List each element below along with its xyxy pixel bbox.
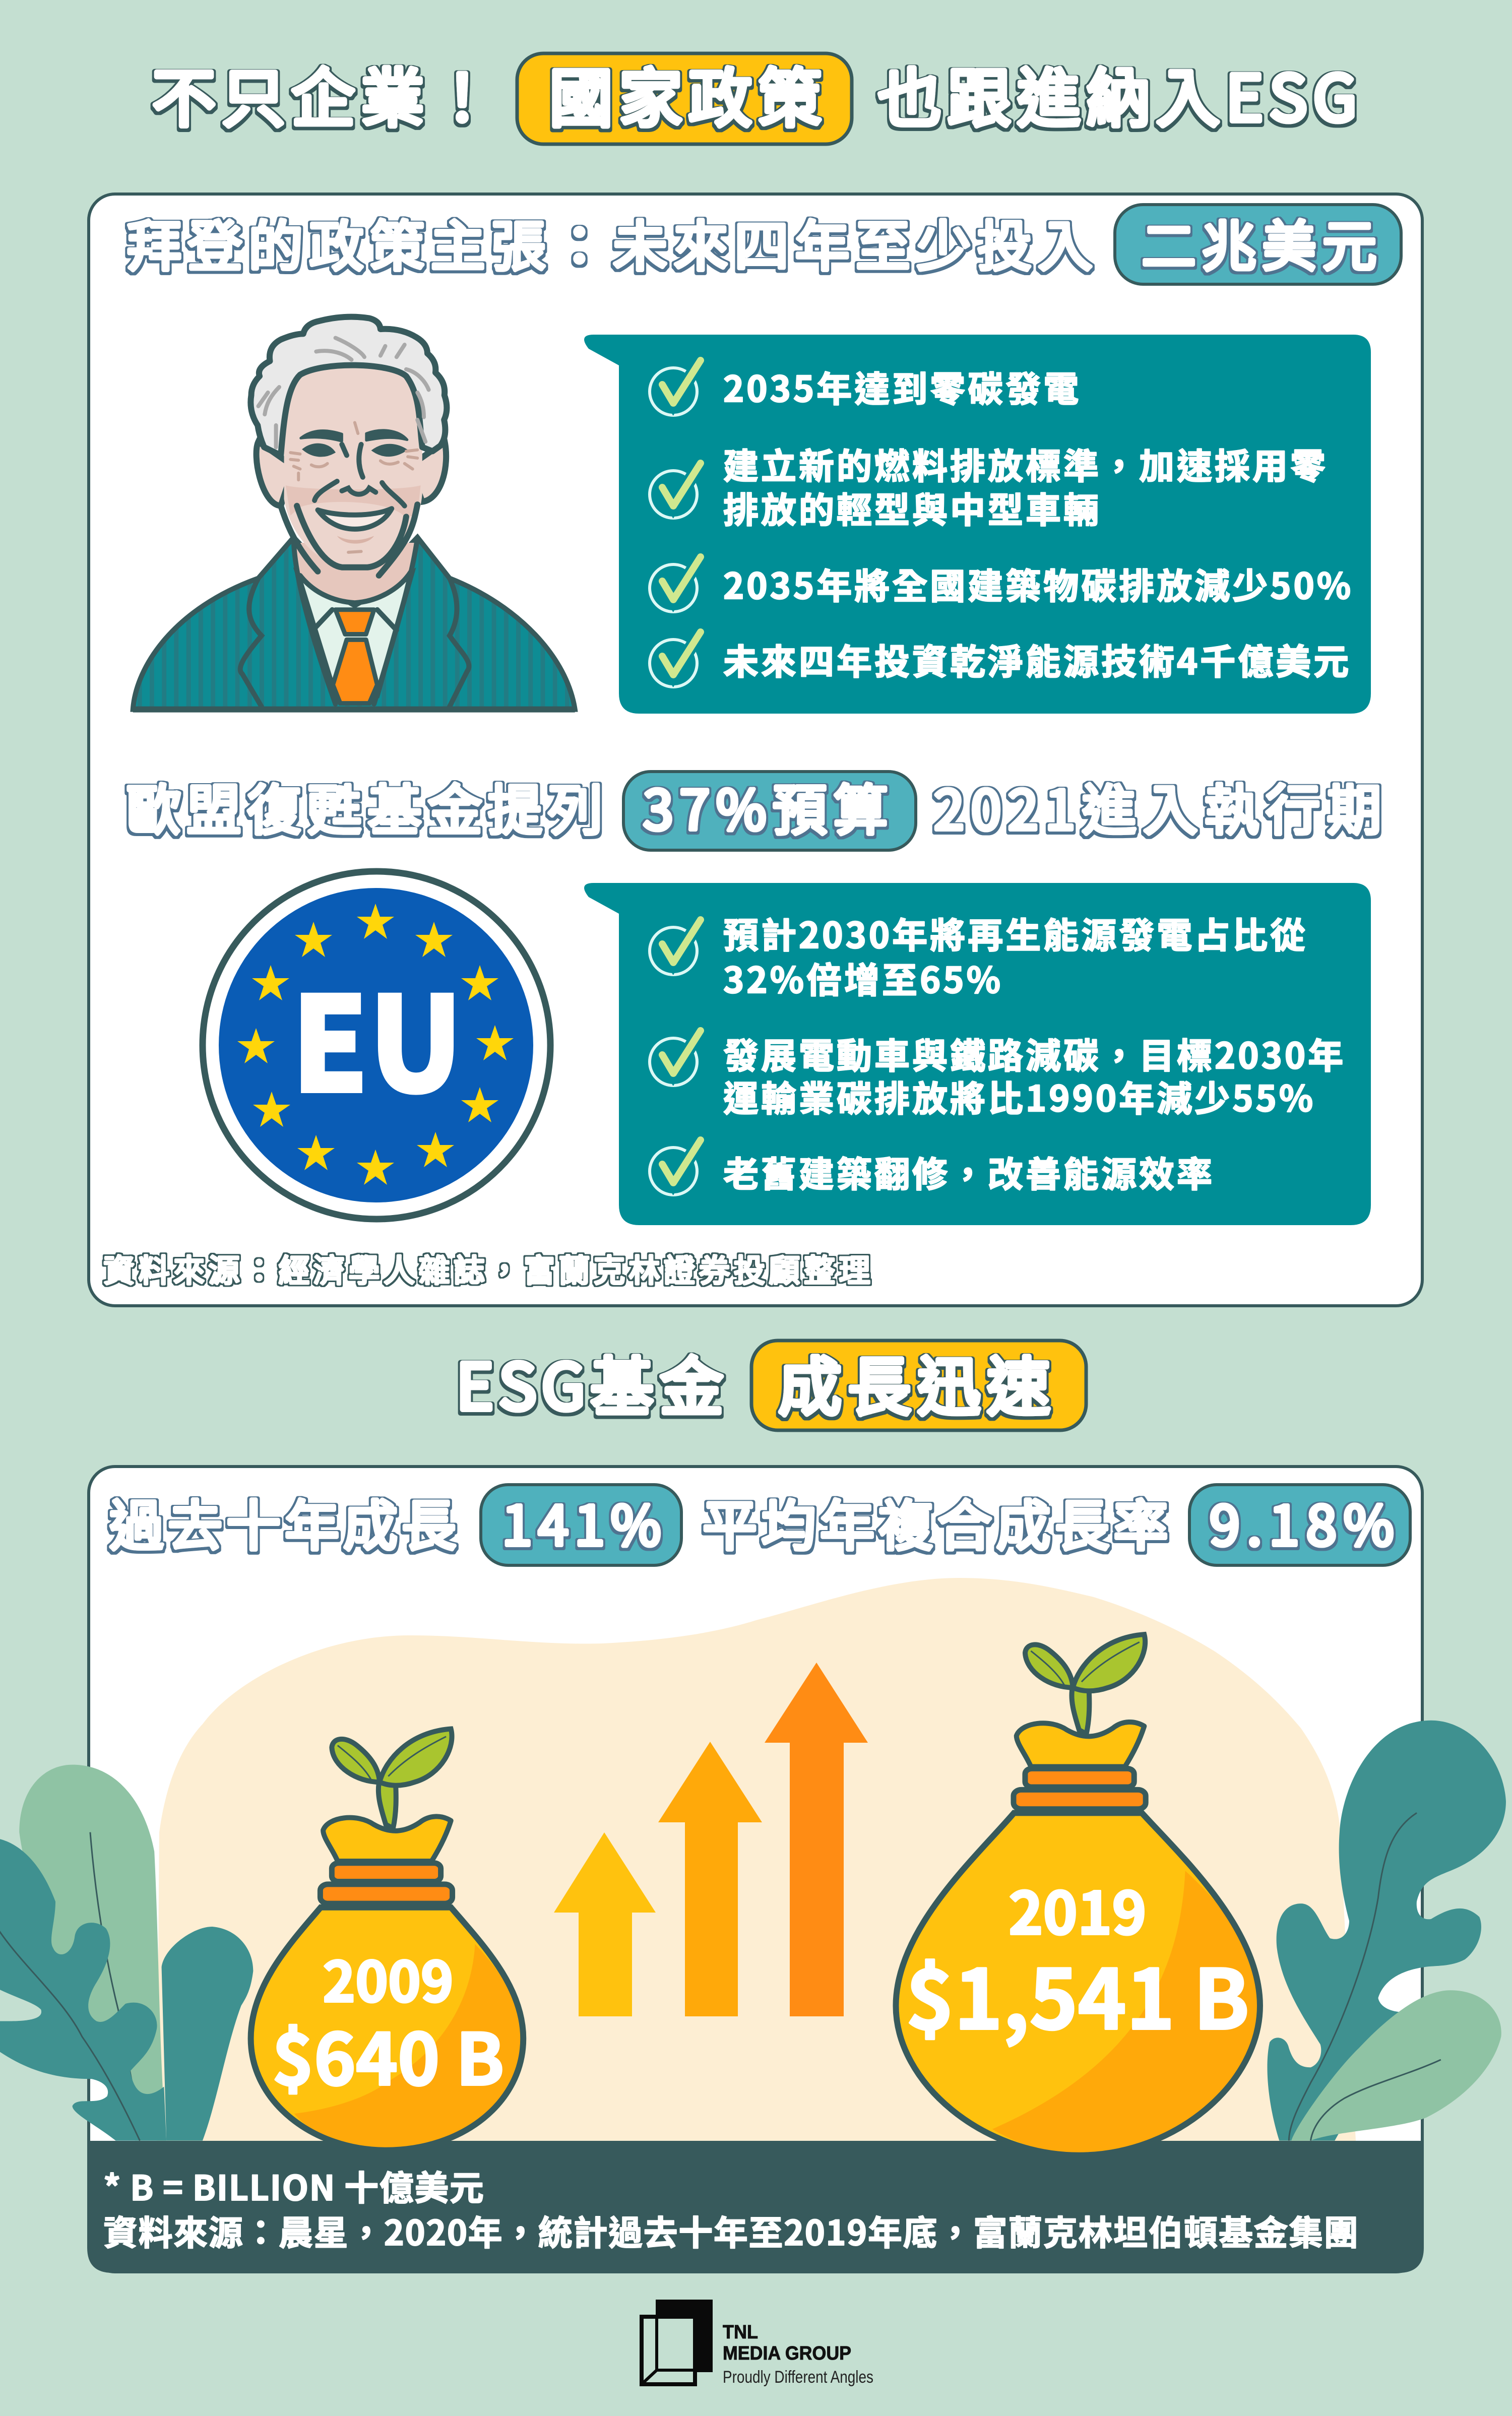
pill: 9.18% bbox=[1189, 1485, 1410, 1565]
arrow: amber bbox=[658, 1742, 762, 2016]
list item 2: 發展電動車與鐵路減碳，目標2030年 bbox=[723, 1028, 1346, 1079]
title bbox=[152, 48, 1363, 144]
bag shape bbox=[251, 1729, 523, 2150]
title text: highlighted: 國家政策 bbox=[549, 48, 828, 140]
icon: check 1 bbox=[650, 360, 701, 415]
title highlight pill bbox=[517, 53, 852, 144]
icon: check 4 bbox=[650, 632, 701, 687]
icon: check 2 bbox=[650, 463, 701, 518]
EU stars bbox=[237, 904, 514, 1185]
list item 2: 建立新的燃料排放標準，加速採用零 bbox=[723, 438, 1328, 489]
illustration: right leaves bbox=[1267, 1721, 1506, 2141]
arrow: yellow bbox=[554, 1832, 656, 2016]
pill: 141% bbox=[481, 1485, 681, 1565]
pill: two trillion bbox=[1115, 205, 1401, 284]
logo tagline: Proudly Different Angles bbox=[723, 2368, 873, 2387]
callout: Biden policy list bbox=[584, 335, 1371, 714]
arrow: orange bbox=[765, 1663, 868, 2016]
list item 4: 未來四年投資乾淨能源技術4千億美元 bbox=[723, 634, 1351, 685]
logo mark bbox=[642, 2300, 713, 2384]
list item 2: 排放的輕型與中型車輛 bbox=[723, 482, 1101, 533]
panel background bbox=[89, 194, 1422, 1306]
list item 1: 預計2030年將再生能源發電占比從 bbox=[723, 908, 1308, 959]
icon: EU badge bbox=[203, 871, 550, 1219]
pill text: 141%: 141% bbox=[502, 1483, 667, 1561]
list item 3: 2035年將全國建築物碳排放減少50% bbox=[723, 558, 1353, 609]
note: B = billion: * B = BILLION 十億美元 bbox=[103, 2160, 485, 2210]
list item 1: 32%倍增至65% bbox=[723, 952, 1003, 1003]
heading: CAGR: 平均年複合成長率 bbox=[703, 1483, 1172, 1561]
pill: 37% budget bbox=[623, 772, 916, 850]
source note: 資料來源：經濟學人雜誌，富蘭克林證券投顧整理 bbox=[103, 1245, 874, 1291]
list item 2: 運輸業碳排放將比1990年減少55% bbox=[723, 1071, 1315, 1122]
callout bubble bbox=[584, 335, 1371, 714]
section title pill bbox=[751, 1341, 1086, 1430]
pill text: two trillion: 二兆美元 bbox=[1142, 203, 1382, 282]
section title text: ESG基金 bbox=[456, 1337, 729, 1428]
logo: TNL Media Group bbox=[642, 2300, 873, 2387]
heading: 2021: 2021進入執行期 bbox=[934, 767, 1388, 846]
icon: money bag 2019 bbox=[896, 1634, 1260, 2155]
value label: $1,541 B bbox=[906, 1934, 1249, 2053]
heading: ten-year growth: 過去十年成長 bbox=[109, 1483, 460, 1561]
callout bubble bbox=[584, 883, 1371, 1225]
pill text: 9.18%: 9.18% bbox=[1210, 1483, 1401, 1561]
icon: check 3 bbox=[650, 557, 701, 612]
icon: check 3 bbox=[650, 1140, 701, 1195]
list item 1: 2035年達到零碳發電 bbox=[723, 361, 1081, 412]
illustration: Biden portrait bbox=[133, 317, 575, 710]
value label: $640 B bbox=[272, 2002, 504, 2106]
bag shape bbox=[896, 1634, 1260, 2155]
section title: ESG funds bbox=[456, 1337, 1086, 1430]
year label: 2019 bbox=[1009, 1867, 1147, 1951]
heading: EU: 歐盟復甦基金提列 bbox=[127, 767, 608, 846]
logo name: TNL bbox=[723, 2322, 758, 2343]
panel: fund growth bbox=[0, 1467, 1506, 2273]
title text: last part: 也跟進納入ESG bbox=[878, 48, 1363, 140]
list item 3: 老舊建築翻修，改善能源效率 bbox=[723, 1147, 1215, 1197]
EU label: EU bbox=[291, 939, 463, 1130]
background blob bbox=[157, 1578, 1356, 2141]
panel: policies bbox=[89, 194, 1422, 1306]
panel background bbox=[89, 1467, 1422, 2272]
logo name line 2: MEDIA GROUP bbox=[723, 2343, 851, 2364]
pill text: 37% budget: 37%預算 bbox=[643, 767, 894, 846]
callout: EU policy list bbox=[584, 883, 1371, 1225]
icon: check 2 bbox=[650, 1031, 701, 1086]
illustration: left leaves bbox=[0, 1765, 253, 2141]
section title highlight: 成長迅速 bbox=[778, 1337, 1056, 1428]
source band bbox=[87, 2141, 1424, 2273]
title text: first part: 不只企業！ bbox=[152, 48, 500, 140]
icon: check 1 bbox=[650, 920, 701, 975]
year label: 2009 bbox=[323, 1937, 454, 2018]
source note: 資料來源：晨星，2020年，統計過去十年至2019年底，富蘭克林坦伯頓基金集團 bbox=[103, 2205, 1359, 2255]
icon: money bag 2009 bbox=[251, 1729, 523, 2150]
heading: Biden: 拜登的政策主張：未來四年至少投入 bbox=[127, 203, 1099, 282]
